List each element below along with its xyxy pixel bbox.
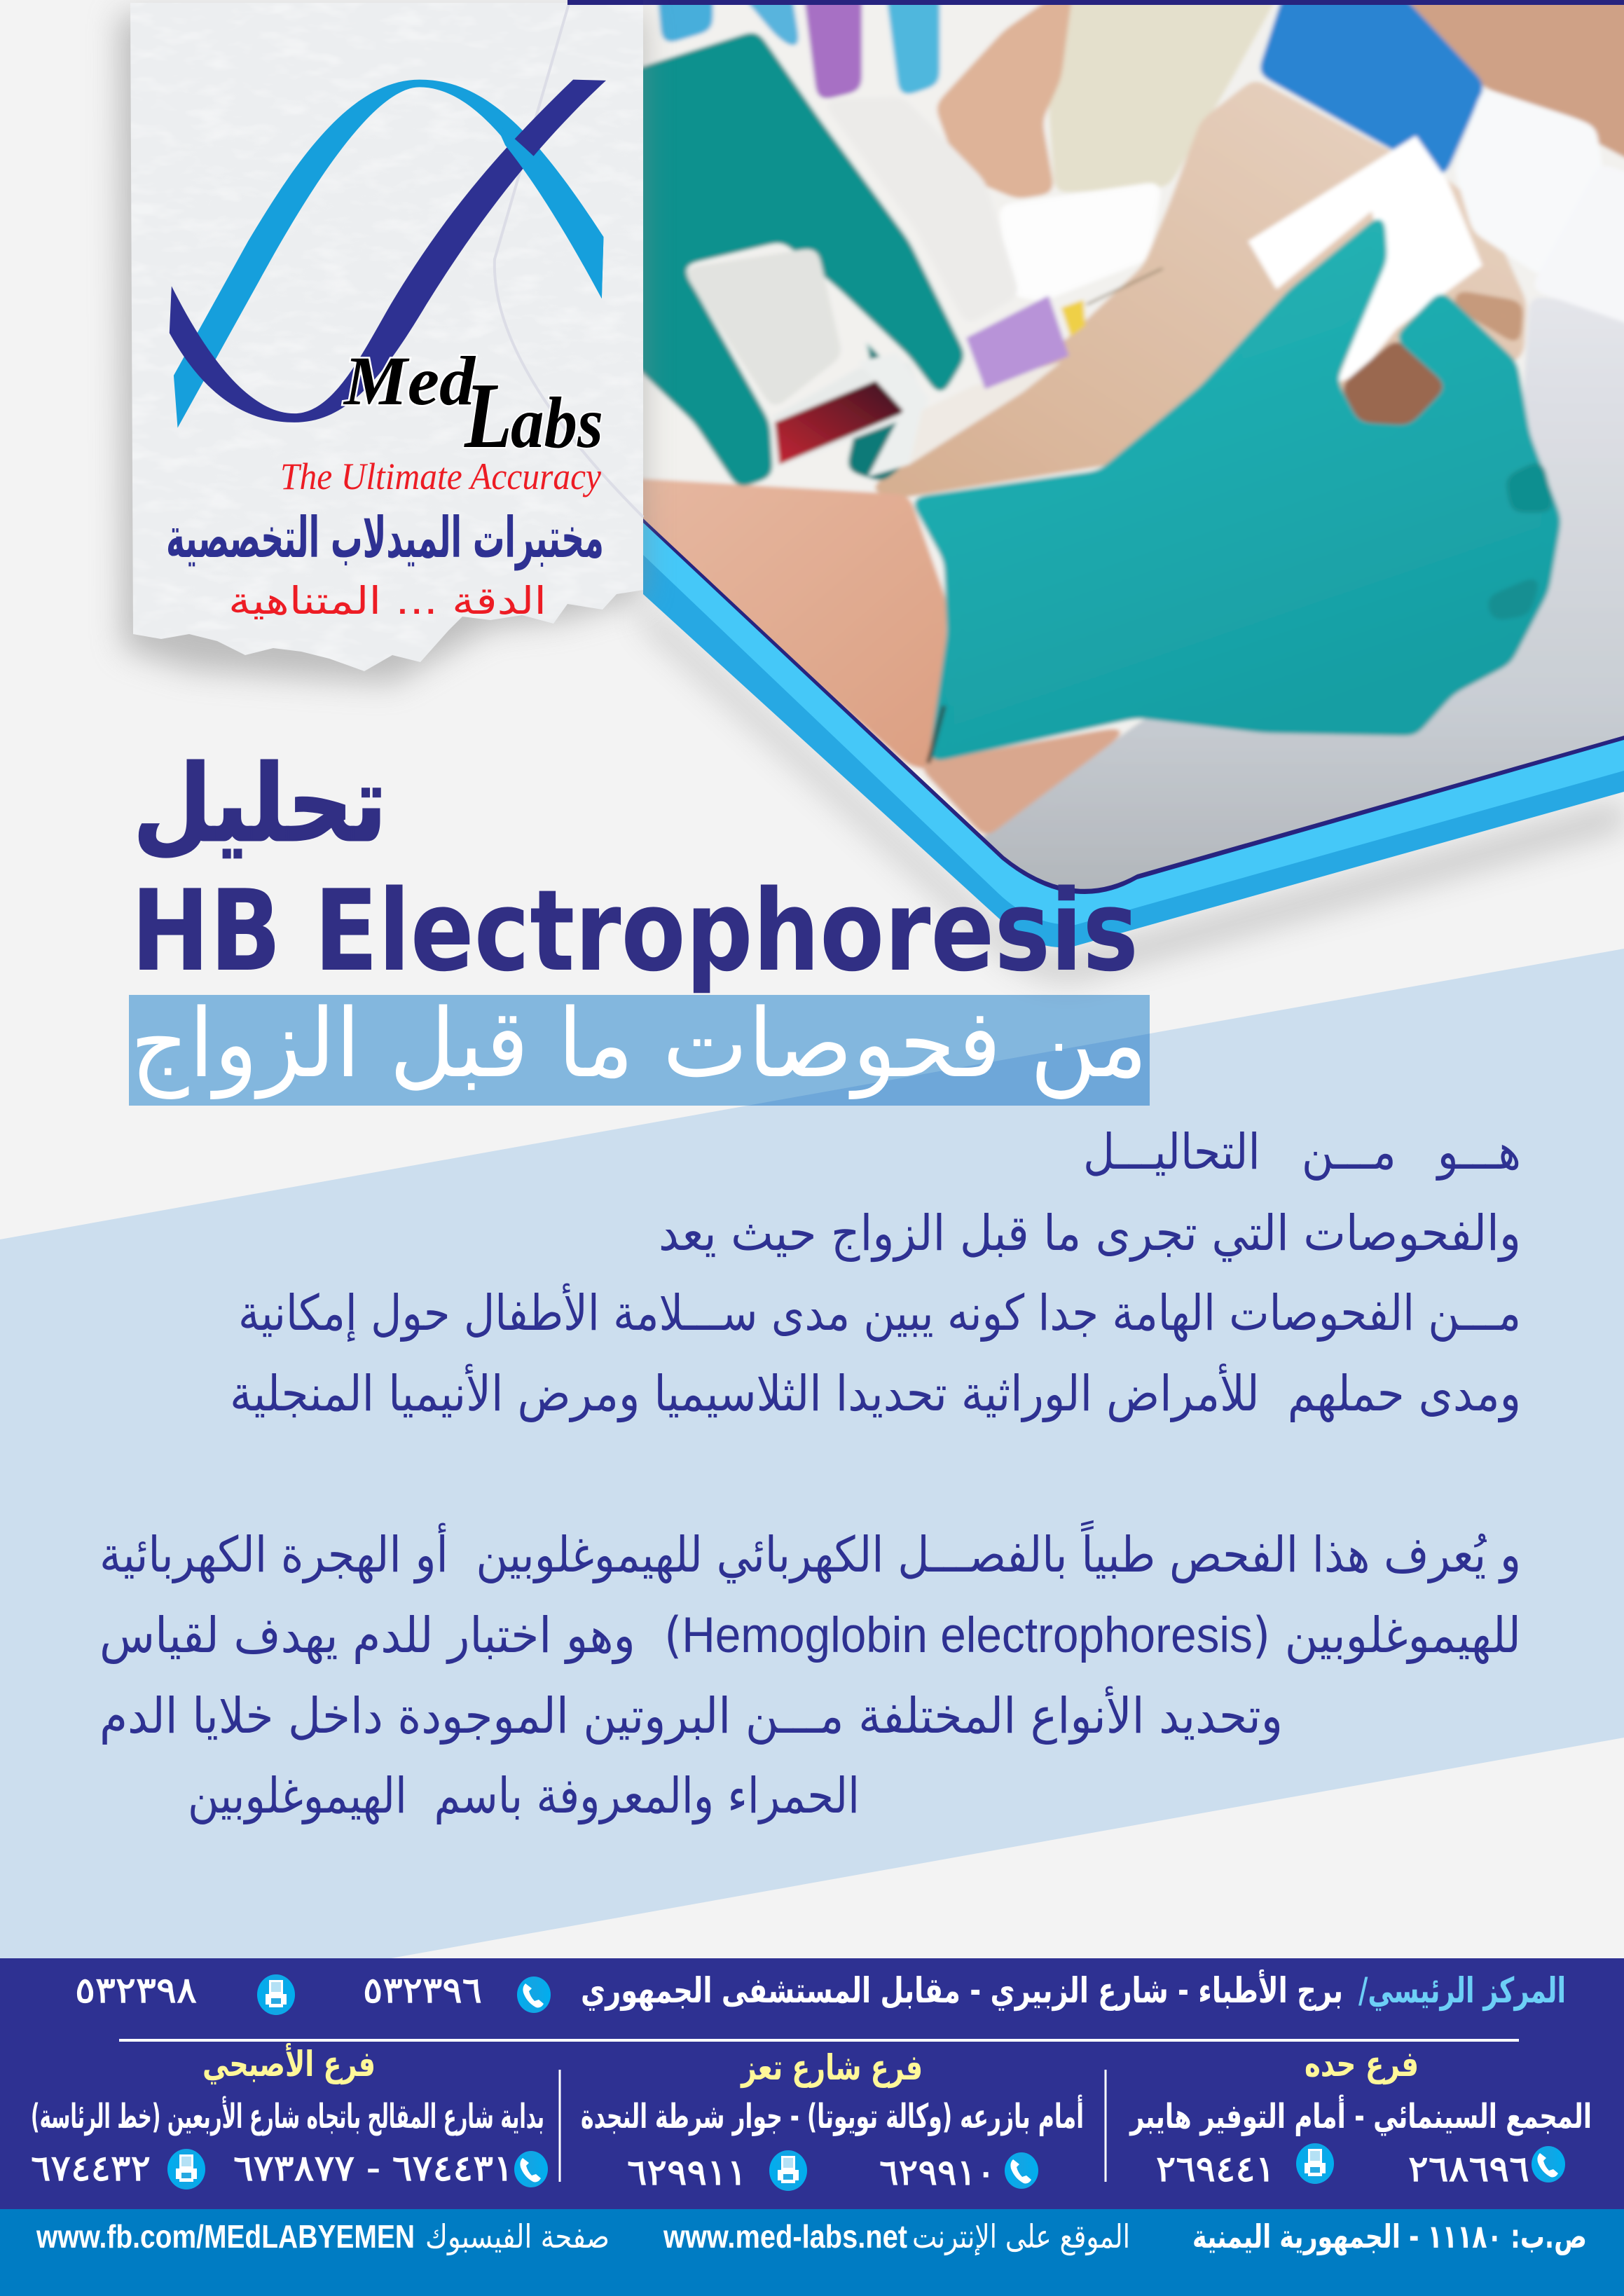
main centre fax: ٥٣٢٣٩٨ [75,1970,197,2012]
logo Arabic tagline: الدقة ... المتناهية [228,579,546,623]
branch dividers [560,2070,1106,2182]
icon: phone [517,1977,551,2013]
subtitle banner: من فحوصات ما قبل الزواج [130,989,1148,1100]
divider [119,2039,1519,2042]
icon: ribbons [170,80,606,428]
title: HB Electrophoresis: HB Electrophoresis [131,865,1138,996]
icon: phone [514,2151,548,2187]
facebook label: صفحة الفيسبوك [425,2218,610,2256]
branch: Taiz street: ٦٢٩٩١٠ [879,2152,996,2194]
branch: Hadda: ٢٦٨٦٩٦ [1408,2149,1529,2190]
facebook url: www.fb.com/MEdLABYEMEN [36,2218,415,2255]
logo torn paper card [119,0,643,683]
branch: Taiz street: ٦٢٩٩١١ [627,2152,747,2194]
footer: web and address strip [0,2209,1624,2296]
branch: Hadda [1129,2044,1592,2190]
main centre phone: ٥٣٢٣٩٦ [363,1970,482,2012]
body text: paragraph 1: هـــو مـــن التحاليـــل [1083,1123,1521,1181]
main centre address: برج الأطباء - شارع الزبيري - مقابل المستشفى الجمهوري [581,1969,1343,2012]
icon: fax [257,1974,295,2015]
body text: paragraph 1 [230,1123,1521,1423]
website: www.med-labs.net [663,2218,907,2255]
body text: paragraph 2: للهيموغلوبين (Hemoglobin electrophoresis) وهو اختبار للدم يهدف لقياس [99,1607,1521,1665]
photo frame: blue bands and blood draw photo [605,0,1624,977]
website label: الموقع على الإنترنت [912,2218,1130,2256]
icon: fax [769,2150,807,2191]
body text: paragraph 2: وتحديد الأنواع المختلفة مـــن البروتين الموجودة داخل خلايا الدم [99,1686,1283,1745]
body text: paragraph 2: الحمراء والمعروفة باسم الهيموغلوبين [188,1767,860,1825]
body text: paragraph 2 [99,1520,1521,1825]
branch: Hadda: ٢٦٩٤٤١ [1156,2149,1275,2190]
icon: fax [1296,2143,1334,2184]
logo word: Med: Med [343,342,476,420]
title: Arabic: تحليل [133,743,387,865]
logo word: Labs: L [464,364,512,467]
icon: phone [1532,2146,1565,2182]
footer: contact panel [0,1958,1624,2209]
icon: phone [1005,2152,1038,2189]
light blue diagonal background panel [0,949,1624,1958]
branch: Asbahi [31,2042,548,2190]
branch: Asbahi: ٦٧٤٤٣٢ [31,2148,151,2190]
body text: paragraph 1: والفحوصات التي تجرى ما قبل الزواج حيث يعد [659,1204,1521,1263]
icon: fax [167,2149,205,2190]
branch: Hadda: فرع حده [1305,2044,1419,2085]
logo word: abs: abs [511,383,603,463]
body text: paragraph 1: ومدى حملهم للأمراض الوراثية تحديدا الثلاسيميا ومرض الأنيميا المنجلية [230,1363,1521,1423]
branch: Asbahi: بداية شارع المقالح باتجاه شارع الأربعين (خط الرئاسة) [31,2096,544,2136]
branch: Taiz street: فرع شارع تعز [740,2047,923,2089]
photo: gloved hands drawing blood [643,5,1624,889]
branch: Asbahi: فرع الأصبحي [202,2042,376,2085]
branch: Asbahi: ٦٧٤٤٣١ - ٦٧٣٨٧٧ [233,2148,514,2190]
logo Arabic name: مختبرات الميدلاب التخصصية [166,505,604,571]
PO box: ص.ب: ١١١٨٠ - الجمهورية اليمنية [1192,2218,1587,2255]
branch: Taiz street [581,2047,1084,2194]
logo: DNA ribbon mark and wordmark [166,80,606,623]
branch: Taiz street: أمام بازرعه (وكالة تويوتا) - جوار شرطة النجدة [581,2094,1084,2136]
logo tagline: The Ultimate Accuracy [280,455,601,497]
